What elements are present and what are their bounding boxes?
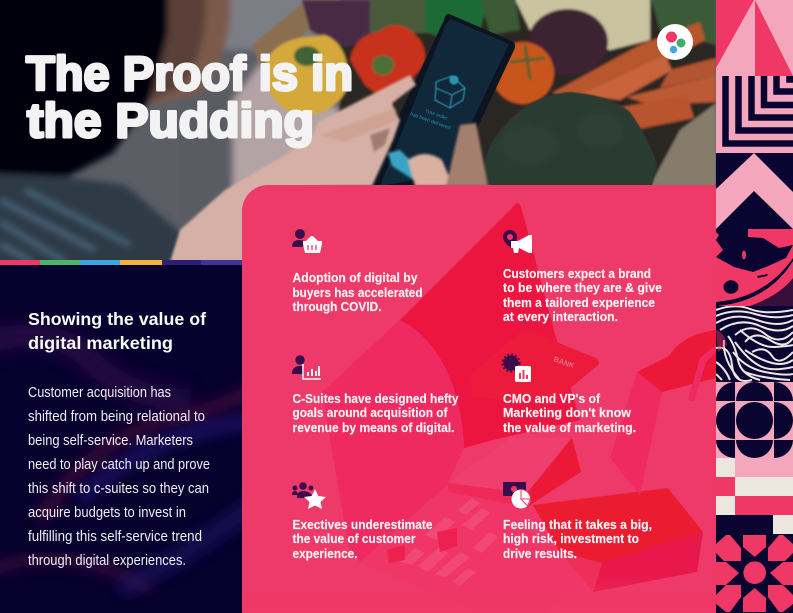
heading: showing the value: digital marketing [28, 333, 173, 353]
panel: pink key points [242, 185, 716, 613]
phone: has been delivered [409, 111, 451, 131]
point 6: big high risk: Feeling that it takes a big, [503, 518, 652, 532]
intro paragraph: acquire budgets to invest in [28, 504, 186, 521]
point 3: c-suites goals [292, 355, 459, 435]
point 2: customers expect a brand: them a tailored experience [503, 296, 655, 310]
tile: colour blocks [716, 458, 793, 534]
point 5: executives underestimate: Exectives underestimate [292, 518, 433, 532]
tile: ink blot [716, 226, 793, 306]
phone screen box graphic [435, 76, 465, 108]
point 4: cmo and vp: Marketing don't know [503, 406, 631, 420]
point 1: adoption of digital: Adoption of digital by [292, 271, 418, 285]
icon: group with star [292, 482, 326, 509]
tile: chevron [716, 153, 793, 229]
point 3: c-suites goals: goals around acquisition of [292, 406, 448, 420]
heading: showing the value: Showing the value of [28, 309, 206, 329]
bank card [554, 342, 599, 388]
intro paragraph: fulfilling this self-service trend [28, 528, 202, 545]
intro paragraph: Customer acquisition has [28, 384, 171, 401]
background illustration: POS terminal, card and boxes [322, 203, 716, 592]
tile: nested corners [716, 76, 793, 153]
intro paragraph: being self-service. Marketers [28, 432, 193, 449]
intro paragraph: shifted from being relational to [28, 408, 205, 425]
phone: Your order [424, 108, 448, 122]
heading: showing the value [28, 309, 206, 353]
icon: banknote with pie chart [503, 482, 530, 508]
icon: person with bar chart [292, 355, 321, 379]
gift box [533, 488, 703, 592]
title: The Proof is in [26, 48, 353, 101]
point 5: executives underestimate: experience. [292, 547, 358, 561]
tile: flower [716, 534, 793, 613]
phone [366, 14, 515, 186]
paper bag [610, 330, 716, 495]
title [26, 48, 353, 148]
icon: gear with chart card [502, 354, 531, 382]
intro paragraph [28, 384, 210, 569]
point 2: customers expect a brand: Customers expect a brand [503, 267, 651, 281]
tile: zebra waves [716, 306, 793, 382]
broccoli [483, 92, 657, 186]
title: the Pudding [27, 95, 314, 148]
shirt stripes [0, 190, 130, 262]
logo badge [657, 24, 693, 60]
intro paragraph: need to play catch up and prove [28, 456, 210, 473]
point 6: big high risk: drive results. [503, 547, 577, 561]
tile: triangles [716, 0, 793, 76]
hands [170, 75, 488, 262]
tile: circles [716, 382, 793, 458]
point 1: adoption of digital [292, 229, 422, 314]
icon: location pin with megaphone [503, 230, 532, 253]
point 3: c-suites goals: revenue by means of digital. [292, 421, 454, 435]
point 4: cmo and vp: CMO and VP's of [503, 392, 601, 406]
point 4: cmo and vp [502, 354, 636, 435]
point 6: big high risk [503, 482, 652, 561]
vegetables [252, 0, 716, 186]
intro paragraph: through digital experiences. [28, 552, 186, 569]
point 5: executives underestimate [292, 482, 433, 561]
pattern strip [716, 0, 793, 613]
point 6: big high risk: high risk, investment to [503, 532, 639, 546]
icon: person with basket [292, 229, 322, 253]
point 5: executives underestimate: the value of customer [292, 532, 416, 546]
point 3: c-suites goals: C-Suites have designed hefty [292, 392, 459, 406]
intro paragraph: this shift to c-suites so they can [28, 480, 209, 497]
calculator body [387, 438, 581, 586]
point 2: customers expect a brand [503, 230, 662, 324]
point 1: adoption of digital: through COVID. [292, 300, 382, 314]
bank card: BANK [552, 354, 576, 370]
photo: hands holding a phone over a vegetable box [0, 0, 716, 270]
point 4: cmo and vp: the value of marketing. [503, 421, 636, 435]
point 2: customers expect a brand: at every interaction. [503, 310, 618, 324]
point 1: adoption of digital: buyers has accelerated [292, 286, 422, 300]
panel: left dark intro [0, 312, 242, 599]
point 2: customers expect a brand: to be where they are & give [503, 281, 662, 295]
colour stripe [0, 260, 242, 265]
